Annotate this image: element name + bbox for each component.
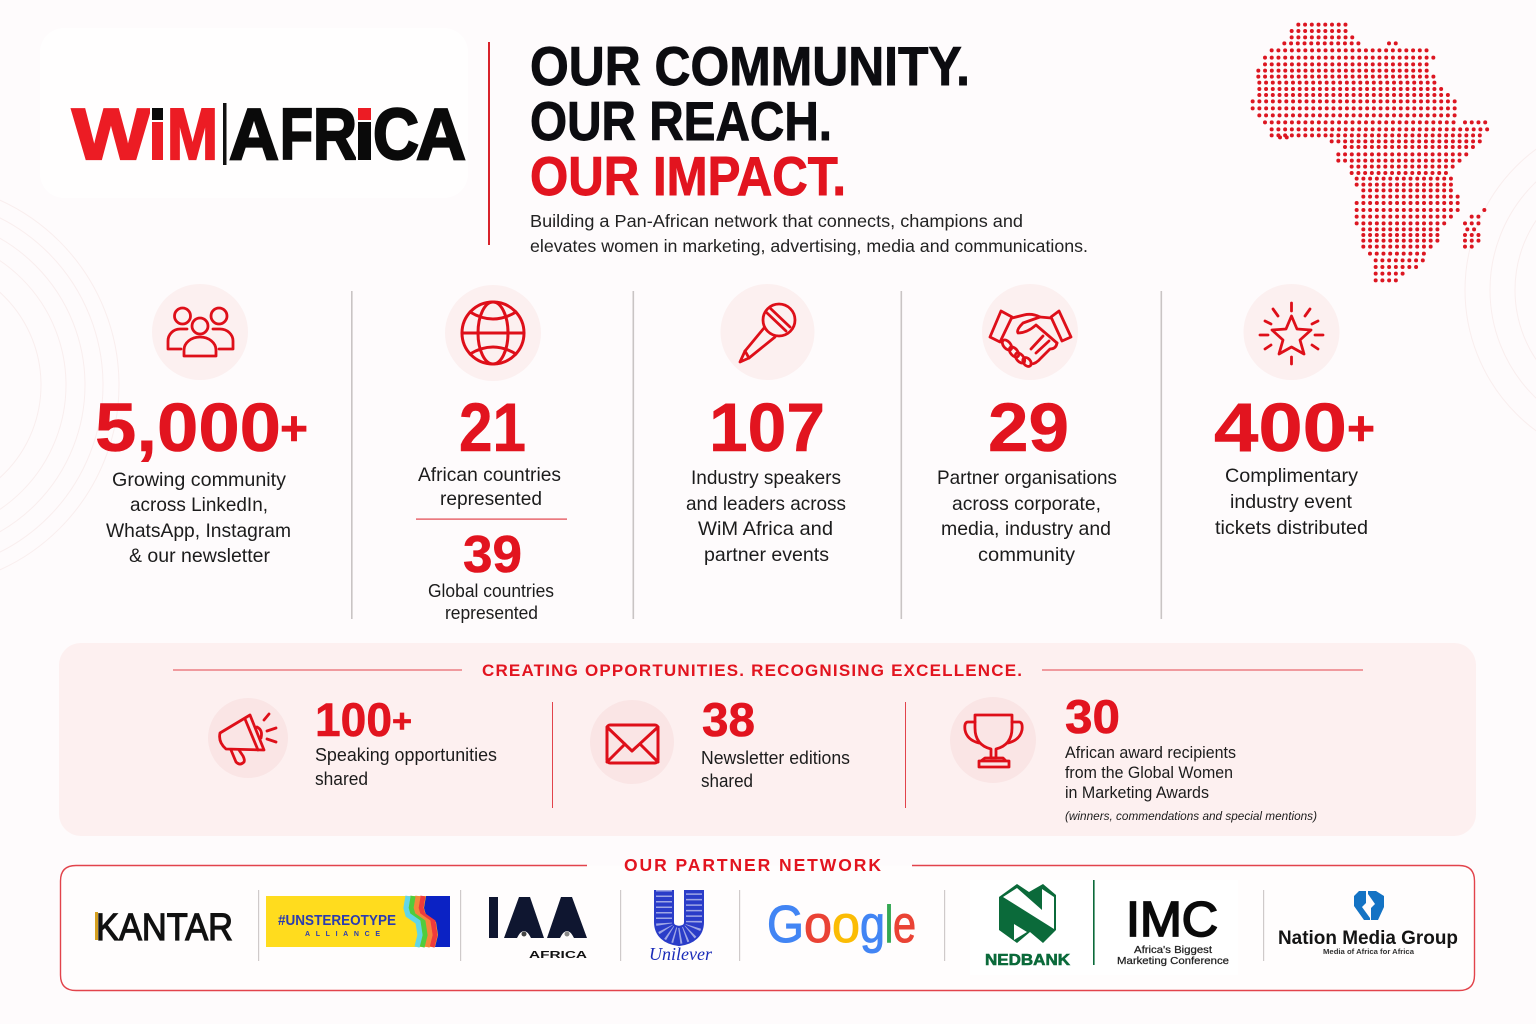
title: OUR COMMUNITY. <box>530 35 970 97</box>
award recipients: from the Global Women <box>1065 764 1233 782</box>
stat: partners: community <box>978 544 1075 566</box>
logo: Google: e <box>893 896 916 954</box>
heading: creating opportunities: CREATING OPPORTUNITIES. RECOGNISING EXCELLENCE. <box>482 661 1022 680</box>
logo: Nedbank: NEDBANK <box>985 952 1070 969</box>
logo: WiM Africa: C <box>373 95 419 175</box>
logo: WiM Africa: M <box>167 95 218 175</box>
stat: speakers <box>686 284 846 566</box>
speaking opportunities: shared <box>315 769 368 789</box>
stat: speakers: and leaders across <box>686 493 846 515</box>
title: OUR IMPACT. <box>530 145 846 207</box>
award recipients: in Marketing Awards <box>1065 784 1209 802</box>
stat: community: 5,000 <box>95 389 281 466</box>
speaking opportunities: + <box>392 703 412 739</box>
logo: WiM Africa: R <box>313 95 357 175</box>
logo: Kantar: KANTAR <box>96 907 233 949</box>
stat: partners <box>937 284 1117 566</box>
icon: star <box>1244 284 1340 380</box>
stat: countries: African countries <box>418 464 561 486</box>
logo: Google: o <box>832 896 860 954</box>
logo: Unstereotype Alliance: #UNSTEREOTYPE <box>278 913 396 929</box>
stat: speakers: 107 <box>709 389 825 466</box>
stat: tickets: + <box>1347 403 1375 456</box>
icon: people <box>152 284 248 380</box>
logo: Unilever <box>649 890 713 964</box>
header divider <box>488 42 490 245</box>
stat: speakers: Industry speakers <box>691 467 841 489</box>
subtitle <box>530 211 1088 256</box>
logo: IMC: IMC <box>1126 893 1218 947</box>
newsletter editions: shared <box>701 771 753 791</box>
stat: countries: represented <box>445 603 538 623</box>
stat dividers <box>351 291 1162 619</box>
stat: countries: 39 <box>463 526 522 584</box>
stat: speakers: WiM Africa and <box>698 518 833 540</box>
logo: Google: g <box>860 896 885 954</box>
award recipients: 30 <box>1065 690 1120 743</box>
stat: tickets: industry event <box>1230 491 1353 513</box>
logo: Nation Media Group: Media of Africa for Africa <box>1323 949 1414 956</box>
logo: IAA Africa: AFRICA <box>529 949 588 961</box>
newsletter editions: Newsletter editions <box>701 748 850 768</box>
stat: partners: 29 <box>988 389 1069 466</box>
title: OUR REACH. <box>530 90 832 152</box>
logo: WiM Africa: I <box>152 95 163 175</box>
heading: partner network: OUR PARTNER NETWORK <box>624 855 881 875</box>
newsletter editions <box>590 693 850 791</box>
logo: Google: G <box>767 896 804 954</box>
logo: IMC: Marketing Conference <box>1117 955 1229 967</box>
logo: Google <box>767 896 916 954</box>
speaking opportunities <box>208 693 497 789</box>
stat: community: Growing community <box>112 469 286 491</box>
stat: countries: represented <box>440 488 542 510</box>
icon: microphone <box>720 284 814 380</box>
logo: WiM Africa: W <box>72 95 150 175</box>
panel: creating opportunities <box>59 643 1476 836</box>
stat: community: & our newsletter <box>129 545 270 567</box>
stat: community: across LinkedIn, <box>130 494 268 516</box>
logo: WiM Africa: A <box>229 95 279 175</box>
logo: Nation Media Group <box>1278 891 1458 956</box>
stat: tickets: 400 <box>1214 389 1347 466</box>
dotted Africa map <box>1253 25 1491 280</box>
logo: Unilever: Unilever <box>649 944 713 964</box>
logo: WiM Africa <box>40 28 468 198</box>
logo: Unstereotype Alliance: ALLIANCE <box>305 931 380 938</box>
stat: countries: Global countries <box>428 581 554 601</box>
newsletter editions: 38 <box>702 693 755 746</box>
stat: countries <box>416 285 567 623</box>
title <box>530 35 970 207</box>
stat: partners: media, industry and <box>941 518 1111 540</box>
logo: IMC: Africa's Biggest <box>1134 944 1212 956</box>
logo: WiM Africa: I <box>358 95 371 175</box>
panel: partner network <box>60 855 1474 990</box>
stat: tickets: Complimentary <box>1225 465 1358 487</box>
stat: community <box>95 284 308 567</box>
logo: Nedbank <box>985 884 1070 969</box>
stat: tickets: tickets distributed <box>1215 517 1368 539</box>
stat: countries: 21 <box>459 389 526 466</box>
logo: IMC <box>1117 893 1229 967</box>
stat: community: WhatsApp, Instagram <box>106 520 291 542</box>
subtitle: Building a Pan-African network that connects, champions and <box>530 211 1023 231</box>
logo: Google: l <box>885 896 893 954</box>
speaking opportunities: Speaking opportunities <box>315 745 497 765</box>
stat: partners: Partner organisations <box>937 467 1117 489</box>
award recipients: (winners, commendations and special mentions) <box>1065 811 1317 823</box>
stat: community: + <box>280 403 308 456</box>
logo: WiM Africa: A <box>416 95 466 175</box>
logo: IAA Africa <box>489 897 588 961</box>
logo: Unstereotype Alliance <box>266 896 450 947</box>
icon: globe <box>445 285 541 381</box>
award recipients: African award recipients <box>1065 744 1236 762</box>
logo: Nation Media Group: Nation Media Group <box>1278 928 1458 949</box>
speaking opportunities: 100 <box>315 693 392 746</box>
stat: speakers: partner events <box>704 544 829 566</box>
award recipients <box>950 690 1317 823</box>
subtitle: elevates women in marketing, advertising, media and communications. <box>530 236 1088 256</box>
icon: handshake <box>982 284 1078 380</box>
logo: WiM Africa: F <box>280 95 313 175</box>
logo: Google: o <box>804 896 832 954</box>
stat: partners: across corporate, <box>952 493 1101 515</box>
stat: tickets <box>1214 284 1375 539</box>
